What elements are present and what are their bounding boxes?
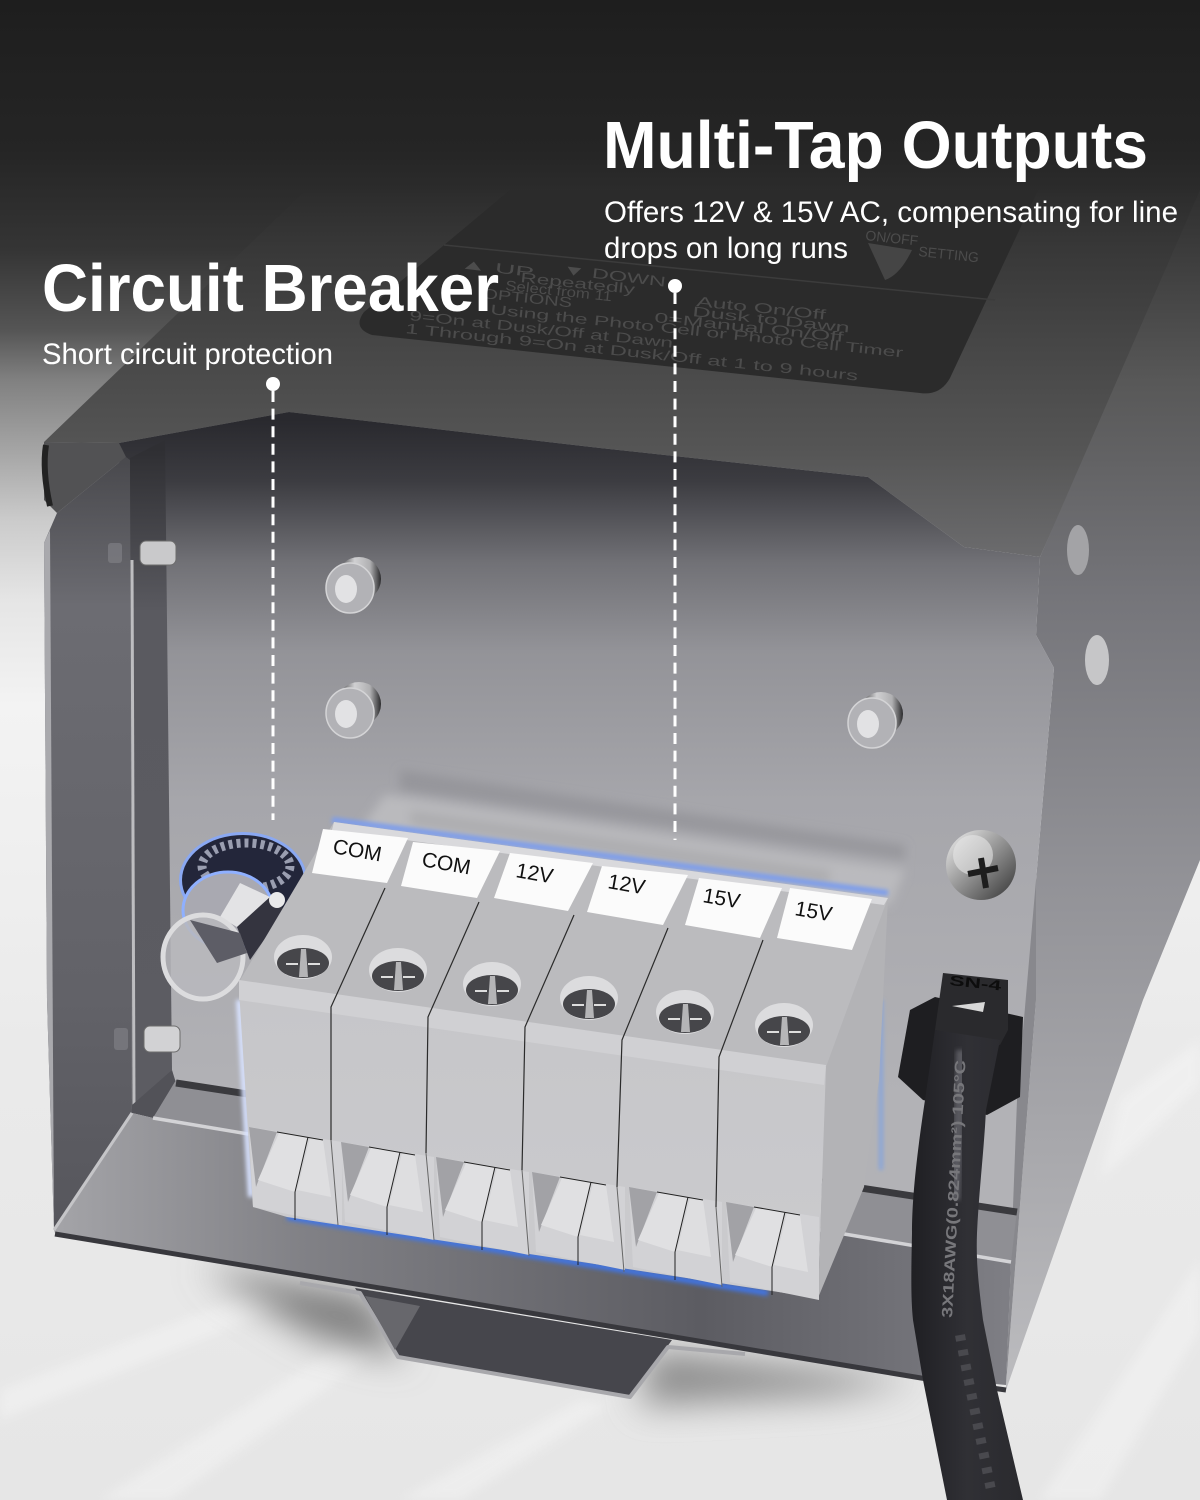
instruction plate (360, 190, 1038, 393)
instruction plate: ON/OFF (865, 227, 919, 249)
front face (239, 990, 826, 1298)
circuit breaker (163, 832, 307, 999)
terminal screws (274, 935, 813, 1047)
terminal label text: COM (331, 835, 383, 866)
small left screw lower (114, 1026, 180, 1052)
bottom tab (355, 1288, 672, 1397)
instruction plate: 1 Through 9=On at Dusk/Off at 1 to 9 hours (405, 320, 859, 384)
instruction plate: ▲ UP (459, 255, 535, 280)
terminal label text (331, 835, 834, 926)
heading: multi-tap outputs: Multi-Tap Outputs (603, 108, 1148, 183)
lid top face (44, 190, 1200, 557)
right side face (1006, 190, 1200, 1390)
callout: multi-tap outputs (603, 108, 1178, 840)
power cord (898, 972, 1023, 1500)
floor corner fill (132, 1070, 176, 1118)
instruction plate: Repeatedly (520, 269, 636, 297)
back rail (176, 1083, 1017, 1212)
standoff lower left (326, 682, 381, 738)
top sloped face (239, 822, 888, 1067)
collar marking: SN-4 (949, 972, 1002, 993)
cable print: 3X18AWG(0.824mm²) 105°C (939, 1059, 970, 1318)
back plate (153, 1080, 1017, 1262)
terminal slots (249, 1127, 819, 1300)
instruction plate: SETTING (918, 243, 980, 265)
tray floor (54, 1113, 1011, 1385)
leader line: multi-tap outputs (668, 279, 682, 840)
side face (818, 898, 888, 1298)
panel screw (946, 830, 1016, 900)
standoff right (848, 692, 903, 748)
description: circuit breaker: Short circuit protection (42, 338, 333, 371)
instruction plate: Select from 11 (505, 277, 613, 304)
seams (331, 888, 763, 1207)
floor shadow left (200, 1265, 405, 1360)
instruction plate: Dusk to Dawn (692, 303, 850, 335)
left inner strip (130, 440, 172, 1107)
terminal block (239, 820, 888, 1300)
seam continuation (331, 1140, 722, 1287)
background streaks (0, 1040, 1200, 1500)
terminal label text: 15V (701, 884, 742, 913)
collar highlight (952, 1002, 985, 1012)
standoff upper left (326, 557, 381, 613)
terminal label text: 15V (793, 897, 834, 926)
cable (911, 1030, 1023, 1500)
instruction plate: Using the Photo Cell or Photo Cell Timer (490, 301, 905, 360)
description: multi-tap outputs (604, 196, 1178, 265)
right side screw lower (1085, 635, 1109, 685)
blurred terminal reflection (360, 770, 905, 905)
tab inner face (365, 1296, 420, 1350)
terminal label text: 12V (606, 870, 647, 899)
instruction plate: 9=On at Dusk/Off at Dawn (409, 307, 674, 351)
heading: circuit breaker: Circuit Breaker (42, 251, 499, 326)
left hook flange (44, 442, 126, 513)
description: multi-tap outputs: drops on long runs (604, 232, 848, 265)
blue glow (239, 820, 888, 1293)
floor shadow right (640, 1350, 920, 1405)
left wall outer edge (44, 530, 54, 1230)
leader line: circuit breaker (266, 377, 280, 820)
instruction plate: 0=Manual On/Off (654, 309, 845, 345)
cable highlight (955, 1050, 961, 1200)
description: multi-tap outputs: Offers 12V & 15V AC, compensating for line (604, 196, 1178, 229)
top strip (332, 822, 888, 905)
strain relief collar (935, 973, 1008, 1045)
terminal label text: 12V (514, 859, 555, 888)
callout: circuit breaker (42, 251, 499, 820)
instruction plate: OPTIONS (482, 285, 573, 310)
device enclosure (44, 190, 1200, 1397)
strain relief (898, 997, 1023, 1115)
small left screw upper (108, 541, 176, 565)
terminal label text: COM (420, 848, 472, 879)
inner brushed panel (119, 412, 1054, 1215)
instruction plate: Auto On/Off (696, 293, 827, 323)
instruction plate: ▼ DOWN (562, 261, 667, 290)
bottom tab edge (300, 1283, 745, 1397)
terminal labels (312, 829, 872, 950)
tray lip (55, 1234, 1006, 1390)
fold highlight (239, 980, 826, 1085)
left wall (44, 457, 132, 1230)
cable print lower (960, 1335, 992, 1495)
right inner wall (1006, 880, 1036, 1385)
right side screw upper (1067, 525, 1089, 575)
